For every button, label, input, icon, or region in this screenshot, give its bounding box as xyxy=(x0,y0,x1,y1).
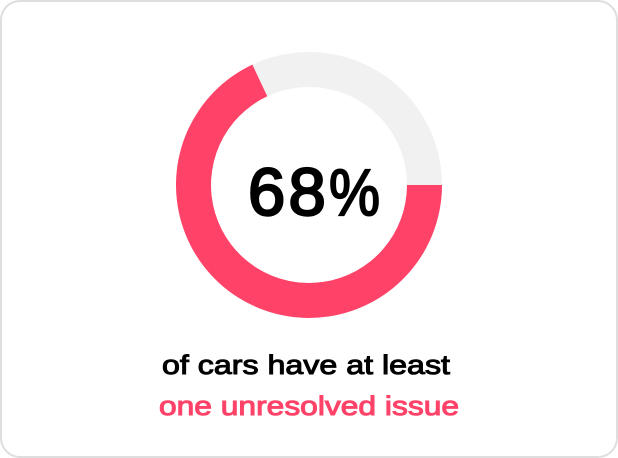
caption line 1: of cars have at least xyxy=(162,350,451,380)
donut track xyxy=(194,70,424,300)
percent sign: % xyxy=(329,155,380,229)
caption line 2 highlight: one unresolved issue xyxy=(159,391,459,421)
donut center value: 8 xyxy=(288,155,326,230)
donut center value: 6 xyxy=(248,155,285,230)
donut chart xyxy=(176,65,442,318)
donut value arc: 68% xyxy=(176,65,442,318)
